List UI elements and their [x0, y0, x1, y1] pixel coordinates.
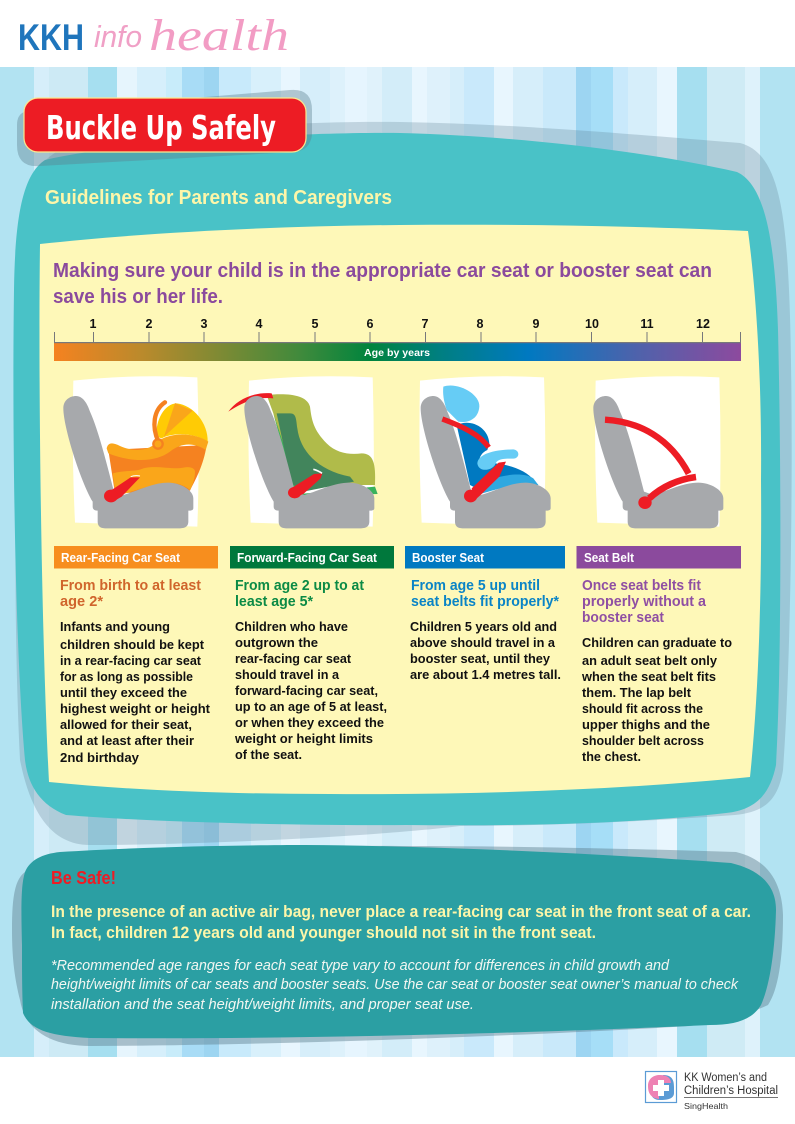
footnote: [51, 957, 739, 1013]
column: rear-facing car seat: children should be kept: [60, 637, 205, 652]
age scale chart: 4: [256, 317, 263, 331]
header logo: KKH info health: [18, 11, 289, 60]
column: booster seat: From age 5 up until: [411, 578, 540, 594]
subtitle: Guidelines for Parents and Caregivers: [45, 187, 392, 209]
column: booster seat: seat belts fit properly*: [411, 594, 559, 610]
panel: yellow content panel: [39, 225, 761, 794]
illustration: forward-facing car seat: [228, 376, 378, 528]
column: booster seat: [405, 546, 565, 682]
header logo: KKH info health: KKH: [18, 17, 84, 58]
column: rear-facing car seat: allowed for their seat,: [60, 717, 192, 732]
age scale chart: 1: [90, 317, 97, 331]
header logo: KKH info health: info: [94, 19, 142, 54]
column: forward-facing car seat: outgrown the: [235, 635, 318, 650]
column: forward-facing car seat: or when they exceed the: [235, 715, 384, 730]
column: rear-facing car seat: highest weight or height: [60, 701, 211, 716]
panel: main teal panel with shadow: [13, 122, 792, 845]
column: booster seat: booster seat, until they: [410, 651, 551, 666]
column: rear-facing car seat: Infants and young: [60, 619, 170, 634]
title: Buckle Up Safely: [46, 108, 276, 147]
column: seat belt: when the seat belt fits: [581, 669, 716, 684]
column: seat belt: Children can graduate to: [582, 635, 732, 650]
panel: title badge: [17, 90, 312, 166]
age scale chart: 9: [533, 317, 540, 331]
column: forward-facing car seat: [230, 546, 394, 762]
footnote: *Recommended age ranges for each seat type vary to account for differences in child growth and: [51, 957, 670, 974]
column: forward-facing car seat: Forward-Facing Car Seat: [237, 550, 378, 565]
column: seat belt: Once seat belts fit: [582, 578, 701, 594]
column: rear-facing car seat: in a rear-facing car seat: [60, 653, 202, 668]
column: forward-facing car seat: Children who have: [235, 619, 348, 634]
age scale chart: 5: [312, 317, 319, 331]
column: seat belt: Seat Belt: [584, 550, 635, 565]
icon: hospital cross: [646, 1072, 676, 1102]
age scale chart: 6: [367, 317, 374, 331]
footer logo: KK Women's and Children's Hospital: SingHealth: [684, 1101, 728, 1111]
column: rear-facing car seat: 2nd birthday: [60, 750, 140, 765]
warning text: In the presence of an active air bag, never place a rear-facing car seat in the front seat of a car.: [51, 902, 751, 921]
age scale chart: 10: [585, 317, 599, 331]
column: seat belt: should fit across the: [582, 701, 703, 716]
column: forward-facing car seat: forward-facing car seat,: [235, 683, 378, 698]
column: booster seat: Booster Seat: [412, 550, 485, 565]
column: seat belt: the chest.: [582, 749, 641, 764]
heading: be safe: Be Safe!: [51, 868, 116, 888]
warning text: In fact, children 12 years old and younger should not sit in the front seat.: [51, 923, 596, 942]
column: booster seat: are about 1.4 metres tall.: [410, 667, 561, 682]
age scale chart: 3: [201, 317, 208, 331]
panel: be safe: [12, 845, 783, 1046]
column: seat belt: them. The lap belt: [582, 685, 692, 700]
header logo: KKH info health: health: [149, 11, 289, 60]
footnote: height/weight limits of car seats and booster seats. Use the car seat or booster seat owner’s manual to check: [51, 976, 739, 993]
column: forward-facing car seat: should travel in a: [235, 667, 340, 682]
age scale chart: 8: [477, 317, 484, 331]
column: booster seat: above should travel in a: [410, 635, 556, 650]
age scale chart: 11: [640, 317, 654, 331]
column: rear-facing car seat: age 2*: [60, 594, 103, 610]
heading: save his or her life.: [53, 285, 223, 308]
column: rear-facing car seat: for as long as possible: [60, 669, 193, 684]
column: rear-facing car seat: [54, 546, 218, 765]
column: rear-facing car seat: until they exceed the: [60, 685, 187, 700]
column: seat belt: an adult seat belt only: [582, 653, 718, 668]
column: forward-facing car seat: rear-facing car seat: [235, 651, 352, 666]
illustration: seat belt: [593, 376, 723, 528]
column: seat belt: properly without a: [582, 594, 707, 610]
warning text: [51, 902, 751, 942]
column: forward-facing car seat: of the seat.: [235, 747, 302, 762]
column: seat belt: upper thighs and the: [582, 717, 710, 732]
column: rear-facing car seat: and at least after their: [60, 733, 194, 748]
age scale chart: 7: [422, 317, 429, 331]
footer logo: KK Women's and Children's Hospital: [646, 1072, 778, 1111]
column: seat belt: [576, 546, 741, 764]
age scale chart: [54, 317, 741, 361]
column: seat belt: booster seat: [582, 610, 664, 626]
column: booster seat: Children 5 years old and: [410, 619, 557, 634]
illustration: booster seat: [419, 376, 551, 528]
column: forward-facing car seat: up to an age of 5 at least,: [235, 699, 387, 714]
footnote: installation and the seat height/weight limits, and proper seat use.: [51, 996, 474, 1013]
age scale chart: 2: [146, 317, 153, 331]
column: forward-facing car seat: From age 2 up to at: [235, 578, 364, 594]
footer logo: KK Women's and Children's Hospital: KK Women’s and: [684, 1072, 767, 1084]
column: forward-facing car seat: least age 5*: [235, 594, 313, 610]
column: forward-facing car seat: weight or height limits: [234, 731, 373, 746]
column: seat belt: shoulder belt across: [582, 733, 704, 748]
heading: Making sure your child is in the appropriate car seat or booster seat can: [53, 259, 712, 282]
column: rear-facing car seat: From birth to at least: [60, 578, 201, 594]
illustration: rear-facing car seat: [63, 376, 208, 528]
heading: [53, 259, 712, 308]
age scale chart: 12: [696, 317, 710, 331]
column: rear-facing car seat: Rear-Facing Car Seat: [61, 550, 181, 565]
age scale chart: Age by years: [364, 347, 430, 359]
footer logo: KK Women's and Children's Hospital: Children’s Hospital: [684, 1085, 778, 1097]
